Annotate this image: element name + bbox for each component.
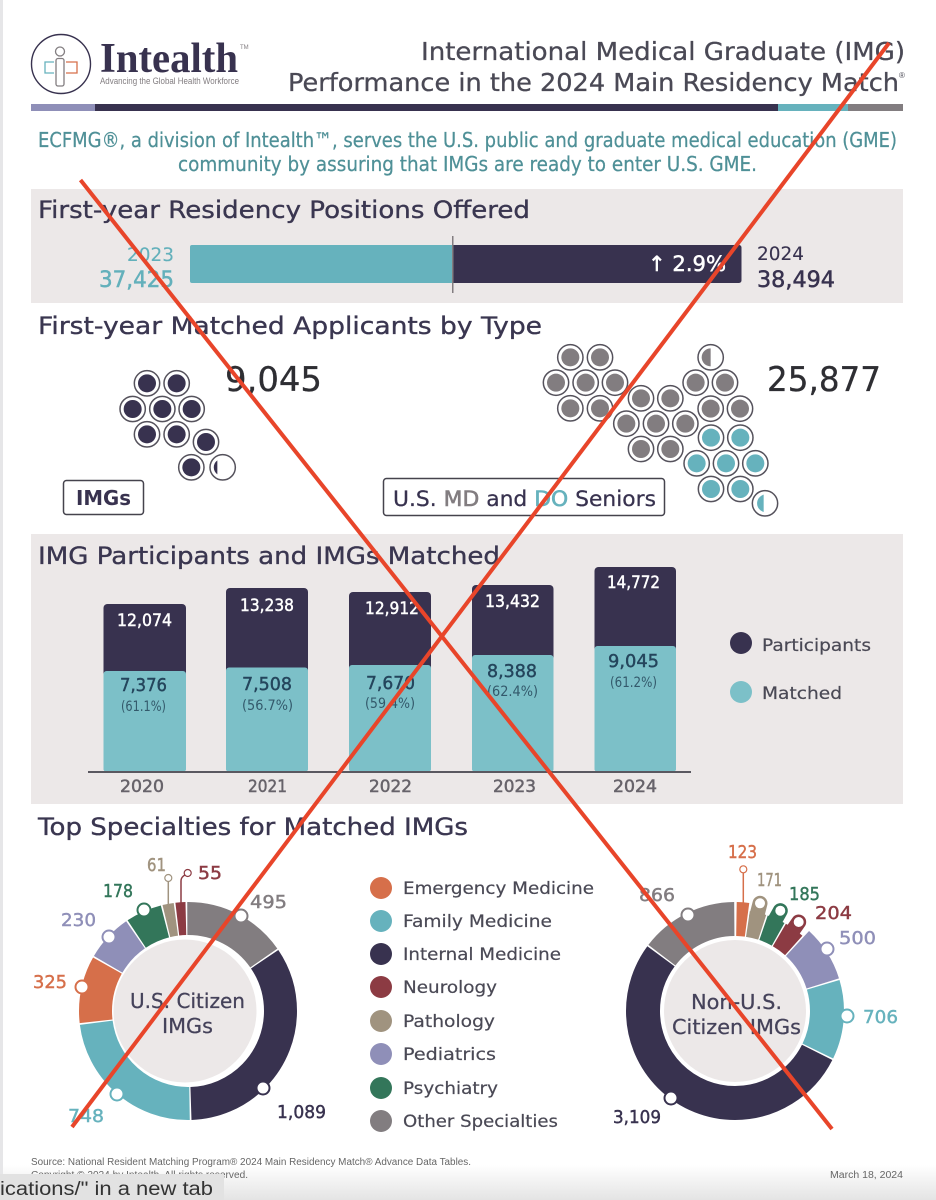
bar chart: 2022 [369, 777, 412, 797]
bar chart: 7,508 [242, 674, 292, 695]
legend: specialties: Other Specialties [403, 1112, 558, 1132]
bar chart: (62.4%) [487, 684, 538, 700]
source footnote: Source: National Resident Matching Program® 2024 Main Residency Match® Advance Data Tables. [31, 1157, 471, 1168]
bar chart: (61.2%) [610, 675, 657, 691]
value labels: 185 [789, 884, 820, 905]
label box: IMGs [64, 480, 144, 514]
value labels: 1,089 [277, 1102, 326, 1123]
panel: first-year residency positions offered [31, 189, 903, 303]
value labels: 178 [103, 881, 133, 902]
label: 2023: 37,425 [99, 268, 174, 293]
bar: 2023 vs 2024: ↑ 2.9% [648, 252, 726, 276]
header colour rule [31, 104, 903, 111]
value labels: 55 [198, 863, 222, 884]
bar chart: (56.7%) [242, 698, 293, 714]
legend: specialties: Family Medicine [403, 912, 552, 932]
date: March 18, 2024 [830, 1170, 903, 1181]
pill callouts on small segments [756, 903, 799, 933]
heading: participants and matched: IMG Participants and IMGs Matched [38, 542, 500, 570]
value: 9,045: 9,045 [225, 360, 322, 400]
value labels: 61 [147, 855, 166, 876]
title [288, 37, 905, 97]
label: 2024 [757, 243, 835, 293]
legend: participants and matched: Matched [762, 684, 842, 704]
donut centre label: IMGs [162, 1014, 213, 1038]
title: ® [899, 71, 905, 80]
legend: participants and matched: Participants [762, 636, 871, 656]
bar chart: 9,045 [608, 651, 659, 672]
donut centre label: Non-U.S. [691, 990, 782, 1014]
legend: specialties: Neurology [403, 978, 497, 998]
heading: positions offered: First-year Residency Positions Offered [38, 196, 530, 224]
label: 2023: 2023 [127, 244, 174, 266]
value labels: 171 [757, 870, 782, 891]
intro text: community by assuring that IMGs are ready to enter U.S. GME. [178, 152, 757, 176]
value labels: 3,109 [613, 1107, 661, 1128]
value labels: 204 [815, 903, 852, 924]
bar chart: 7,376 [120, 675, 167, 696]
label box: U.S. MD and DO Seniors: U.S. MD and DO Seniors [393, 487, 656, 511]
value labels: 325 [33, 972, 67, 993]
legend: specialties: Internal Medicine [403, 945, 561, 965]
value labels: 748 [68, 1106, 104, 1127]
title: International Medical Graduate (IMG) [421, 37, 905, 66]
bar chart: (59.4%) [365, 696, 415, 712]
legend: participants and matched [730, 632, 871, 704]
heading: top specialties: Top Specialties for Matched IMGs [37, 813, 468, 841]
legend: specialties: Emergency Medicine [403, 879, 594, 899]
bar chart: 13,238 [240, 596, 294, 616]
panel: IMG participants and matched chart [31, 534, 903, 804]
value labels: 495 [250, 892, 287, 913]
leader lines and dots [76, 870, 270, 1100]
value labels: 500 [839, 928, 876, 949]
intro text [38, 128, 897, 176]
logo: Intealth: Advancing the Global Health Workforce [100, 76, 239, 86]
red X: line from top right to bottom left [72, 43, 889, 1127]
title: Performance in the 2024 Main Residency Match [288, 68, 899, 97]
bar chart: 8,388 [487, 661, 537, 682]
label box: U.S. MD and DO Seniors [384, 478, 664, 516]
bar chart: 13,432 [485, 592, 540, 612]
logo: Intealth: TM [240, 45, 249, 51]
bar chart: 2020 [120, 777, 164, 797]
value labels: 123 [728, 842, 757, 863]
donut centre label [672, 990, 801, 1039]
heading: matched applicants by type: First-year Matched Applicants by Type [38, 312, 542, 340]
value: 25,877: 25,877 [767, 360, 881, 400]
pictogram: U.S. MD and DO seniors [543, 345, 778, 516]
legend: specialties: Pediatrics [403, 1045, 496, 1065]
bar chart: 12,074 [117, 611, 172, 631]
source footnote [31, 1157, 471, 1181]
value labels [33, 855, 326, 1127]
red X: line from top left to bottom right [80, 180, 832, 1129]
bar chart: 2023 [493, 777, 536, 797]
value labels: 866 [639, 885, 675, 906]
bar chart: 12,912 [365, 599, 419, 619]
label box: IMGs: IMGs [76, 486, 131, 510]
leader lines and dots [664, 866, 854, 1104]
browser link tooltip: ications/" in a new tab [0, 1179, 213, 1200]
browser link tooltip [0, 1174, 224, 1200]
pictogram: IMGs [120, 371, 235, 480]
bar chart: 14,772 [607, 573, 660, 593]
donut centre label: U.S. Citizen [130, 989, 245, 1013]
donut: U.S. citizen IMGs [33, 855, 326, 1127]
logo: Intealth: Intealth [100, 36, 238, 82]
bar chart [88, 567, 691, 797]
source footnote: Copyright © 2024 by Intealth. All rights reserved. [31, 1170, 248, 1181]
donut: non-U.S. citizen IMGs [613, 842, 898, 1128]
donut centre label [130, 989, 245, 1038]
label: 2024: 38,494 [757, 268, 835, 293]
bar: 2023 vs 2024 [190, 236, 742, 293]
donut centre label: Citizen IMGs [672, 1015, 801, 1039]
value labels: 706 [863, 1007, 898, 1028]
label: 2023 [99, 244, 174, 293]
bar chart: 2024 [613, 777, 657, 797]
legend: specialties: Pathology [403, 1012, 495, 1032]
bar chart: 2021 [248, 777, 287, 797]
legend: specialties: Psychiatry [403, 1079, 498, 1099]
label: 2024: 2024 [757, 243, 804, 265]
legend: specialties [370, 877, 594, 1132]
logo: Intealth [32, 34, 249, 94]
value labels: 230 [61, 910, 96, 931]
bar chart: 7,670 [366, 673, 415, 694]
value labels [613, 842, 898, 1128]
bar chart: (61.1%) [121, 699, 166, 715]
